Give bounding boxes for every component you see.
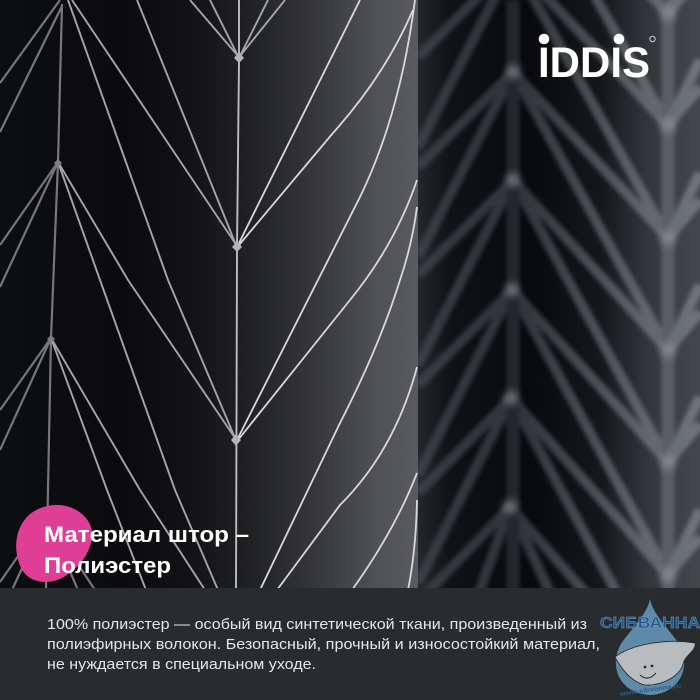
pattern nodes bbox=[47, 52, 244, 446]
text block: description: полиэфирных волокон. Безопасный, прочный и износостойкий материал, bbox=[47, 636, 600, 653]
heading bbox=[44, 522, 249, 578]
icon: iddis logo: IDDIS bbox=[538, 39, 650, 87]
text block: description: 100% полиэстер — особый вид синтетической ткани, произведенный из bbox=[47, 616, 587, 633]
text block: description: не нуждается в специальном уходе. bbox=[47, 656, 316, 673]
icon: Sibvanna watermark bbox=[600, 599, 700, 698]
panel: foreground curtain fabric bbox=[0, 0, 418, 590]
panel: description footer bbox=[0, 588, 700, 700]
heading: Полиэстер bbox=[44, 553, 171, 578]
icon: pink blob behind heading bbox=[16, 505, 92, 582]
icon: Sibvanna watermark: www.sibvanna.ru bbox=[618, 682, 682, 698]
centre column pattern lines bbox=[51, 0, 285, 590]
text block: description bbox=[47, 616, 600, 673]
icon: Sibvanna watermark: СИБВАННА bbox=[600, 615, 700, 632]
right side curved pattern lines bbox=[238, 0, 417, 590]
heading: Материал штор – bbox=[44, 522, 249, 547]
left column pattern lines bbox=[0, 0, 95, 590]
panel: blurred background curtain bbox=[417, 0, 700, 700]
